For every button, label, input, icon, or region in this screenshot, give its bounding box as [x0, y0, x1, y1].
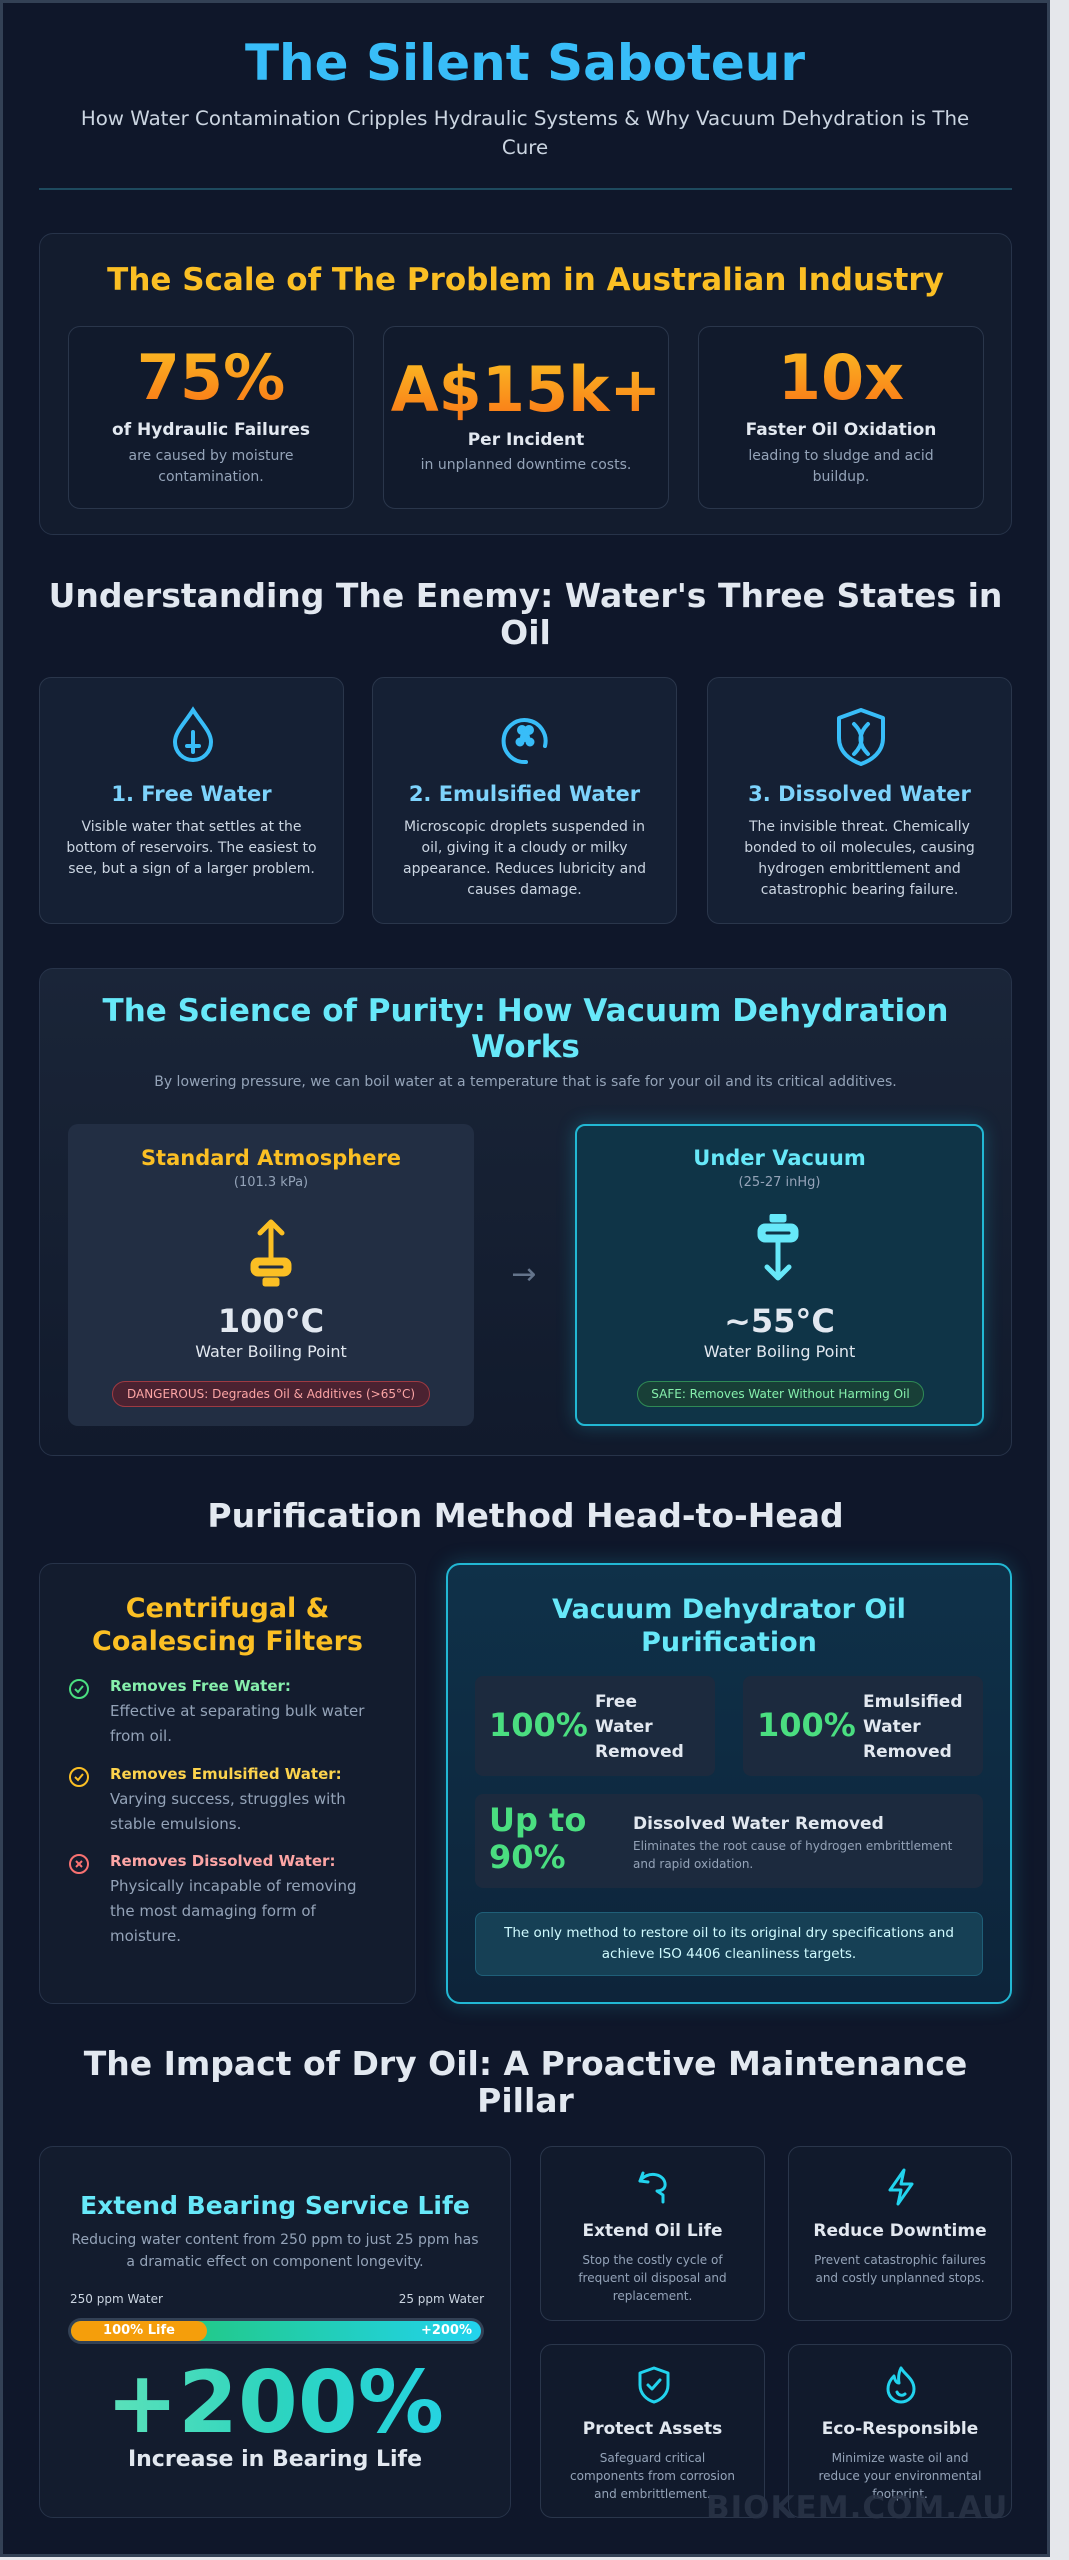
panel: centrifugal filters [39, 1563, 416, 2004]
icon: thermometer up [250, 1220, 292, 1286]
panel: science of purity [39, 968, 1012, 1456]
bar chart: 250 ppm Water [70, 2292, 163, 2306]
icon: lightning [888, 2168, 914, 2206]
card: protect assets: Protect Assets [583, 2419, 722, 2439]
stat card 2 [383, 326, 669, 509]
title: The Silent Saboteur [245, 34, 805, 92]
icon: thermometer down [758, 1214, 798, 1280]
stat: emulsified water [743, 1676, 983, 1776]
stat card 2: in unplanned downtime costs. [421, 457, 631, 473]
subheading: By lowering pressure, we can boil water at a temperature that is safe for your oil and its critical additives. [154, 1074, 897, 1090]
stat: emulsified water: Emulsified [863, 1692, 963, 1712]
box: standard atmosphere: 100°C [218, 1302, 324, 1340]
stat: emulsified water: Water [863, 1717, 921, 1737]
heading: head-to-head: Purification Method Head-to-Head [207, 1496, 844, 1535]
stat: dissolved water: 90% [489, 1838, 566, 1876]
card: free water [39, 677, 344, 924]
item: free water: Effective at separating bulk water from oil. [110, 1702, 364, 1745]
icon: drop [173, 706, 213, 762]
card: dissolved water [707, 677, 1012, 924]
bar chart [68, 2292, 484, 2344]
panel: bearing life: Increase in Bearing Life [128, 2447, 422, 2472]
card: dissolved water: 3. Dissolved Water [748, 782, 971, 806]
card: reduce downtime [788, 2146, 1012, 2321]
card: eco-responsible: Minimize waste oil and reduce your environmental footprint. [818, 2451, 981, 2501]
card: protect assets [540, 2344, 765, 2518]
box: standard atmosphere: Standard Atmosphere [141, 1146, 401, 1170]
item: free water [69, 1677, 364, 1745]
item: emulsified water: Removes Emulsified Water: [110, 1765, 342, 1783]
box: standard atmosphere: Water Boiling Point [195, 1342, 347, 1361]
panel: bearing life: Reducing water content from 250 ppm to just 25 ppm has a dramatic effect on component longevity. [71, 2232, 479, 2270]
bar chart: +200% [421, 2323, 472, 2338]
icon: shield [837, 708, 885, 766]
pill: dangerous [112, 1381, 430, 1407]
item: free water: Removes Free Water: [110, 1677, 291, 1695]
box: under vacuum: ~55°C [724, 1302, 835, 1340]
big stat: +200% [106, 2353, 444, 2453]
item: emulsified water [69, 1765, 346, 1833]
stat card 3 [698, 326, 984, 509]
stat: free water: Free [595, 1692, 637, 1712]
watermark: BIOKEM.COM.AU [706, 2490, 1008, 2526]
pill: safe [637, 1381, 924, 1407]
stat: emulsified water: Removed [863, 1742, 952, 1762]
box: under vacuum: Water Boiling Point [704, 1342, 855, 1361]
card: emulsified water: 2. Emulsified Water [409, 782, 640, 806]
box: standard atmosphere [68, 1124, 474, 1426]
stat card 1: of Hydraulic Failures [112, 420, 310, 440]
panel: bearing life: Extend Bearing Service Life [80, 2191, 470, 2220]
stat card 3: 10x [778, 341, 904, 414]
panel: centrifugal filters: Centrifugal & Coalescing Filters [92, 1593, 363, 1657]
card: protect assets: Safeguard critical components from corrosion and embrittlement. [570, 2451, 735, 2501]
card: emulsified water: Microscopic droplets suspended in oil, giving it a cloudy or milky appearance. Reduces lubricity and causes damage. [403, 819, 646, 898]
stat card 1 [68, 326, 354, 509]
panel: vacuum dehydrator [446, 1563, 1012, 2004]
stat: free water: 100% [489, 1706, 588, 1744]
stat card 2: Per Incident [468, 430, 584, 450]
stat card 2: A$15k+ [391, 353, 661, 426]
stat: free water [475, 1676, 715, 1776]
pill: dangerous: DANGEROUS: Degrades Oil & Additives (>65°C) [127, 1387, 415, 1401]
card: extend oil life: Extend Oil Life [582, 2221, 723, 2241]
icon: recycle arrow [638, 2172, 667, 2204]
stat: free water: Water [595, 1717, 653, 1737]
card: extend oil life: Stop the costly cycle of frequent oil disposal and replacement. [578, 2253, 727, 2303]
arrow: → [511, 1257, 537, 1292]
pill: safe: SAFE: Removes Water Without Harming Oil [651, 1387, 910, 1401]
stat card 1: 75% [137, 341, 285, 414]
item: dissolved water: Physically incapable of removing the most damaging form of moisture. [110, 1877, 356, 1945]
panel heading: The Scale of The Problem in Australian Industry [107, 262, 944, 298]
item: emulsified water: Varying success, struggles with stable emulsions. [110, 1790, 346, 1833]
heading: The Science of Purity: How Vacuum Dehydration Works [103, 993, 948, 1065]
box: under vacuum: Under Vacuum [693, 1146, 866, 1170]
box: standard atmosphere: (101.3 kPa) [234, 1175, 308, 1190]
stat: emulsified water: 100% [757, 1706, 856, 1744]
bar chart: 100% Life [103, 2323, 175, 2338]
card: eco-responsible [788, 2344, 1012, 2518]
card: eco-responsible: Eco-Responsible [822, 2419, 978, 2439]
card: free water: Visible water that settles at the bottom of reservoirs. The easiest to see, but a sign of a larger problem. [66, 819, 317, 877]
panel: scale of problem [39, 233, 1012, 535]
icon: flame [886, 2366, 916, 2404]
heading: understanding the enemy: Understanding The Enemy: Water's Three States in Oil [49, 576, 1002, 652]
note box [475, 1912, 983, 1976]
box: under vacuum [575, 1124, 984, 1426]
card: emulsified water [372, 677, 677, 924]
icon: emulsion [502, 718, 548, 764]
panel: vacuum dehydrator: Vacuum Dehydrator Oil Purification [552, 1594, 906, 1658]
stat: free water: Removed [595, 1742, 684, 1762]
card: reduce downtime: Reduce Downtime [813, 2221, 987, 2241]
subtitle: How Water Contamination Cripples Hydraulic Systems & Why Vacuum Dehydration is The Cure [81, 107, 969, 159]
box: under vacuum: (25-27 inHg) [739, 1175, 820, 1190]
stat: dissolved water: Eliminates the root cause of hydrogen embrittlement and rapid oxidation. [633, 1839, 952, 1871]
card: free water: 1. Free Water [111, 782, 272, 806]
stat card 1: are caused by moisture contamination. [129, 448, 293, 485]
icon: shield check [638, 2366, 670, 2404]
heading: impact of dry oil: The Impact of Dry Oil: A Proactive Maintenance Pillar [84, 2044, 967, 2120]
bar chart: 25 ppm Water [399, 2292, 484, 2306]
stat: dissolved water [475, 1794, 983, 1888]
item: dissolved water: Removes Dissolved Water: [110, 1852, 335, 1870]
stat card 3: Faster Oil Oxidation [746, 420, 936, 440]
card: extend oil life [540, 2146, 765, 2321]
stat: dissolved water: Dissolved Water Removed [633, 1814, 884, 1834]
stat: dissolved water: Up to [489, 1801, 586, 1839]
item: dissolved water [69, 1852, 356, 1945]
card: reduce downtime: Prevent catastrophic failures and costly unplanned stops. [814, 2253, 986, 2285]
card: dissolved water: The invisible threat. Chemically bonded to oil molecules, causing hydrogen embrittlement and catastrophic bearing failure. [744, 819, 975, 898]
note box: The only method to restore oil to its original dry specifications and achieve ISO 4406 cleanliness targets. [504, 1925, 954, 1962]
panel: bearing life [39, 2146, 511, 2518]
stat card 3: leading to sludge and acid buildup. [748, 448, 934, 485]
